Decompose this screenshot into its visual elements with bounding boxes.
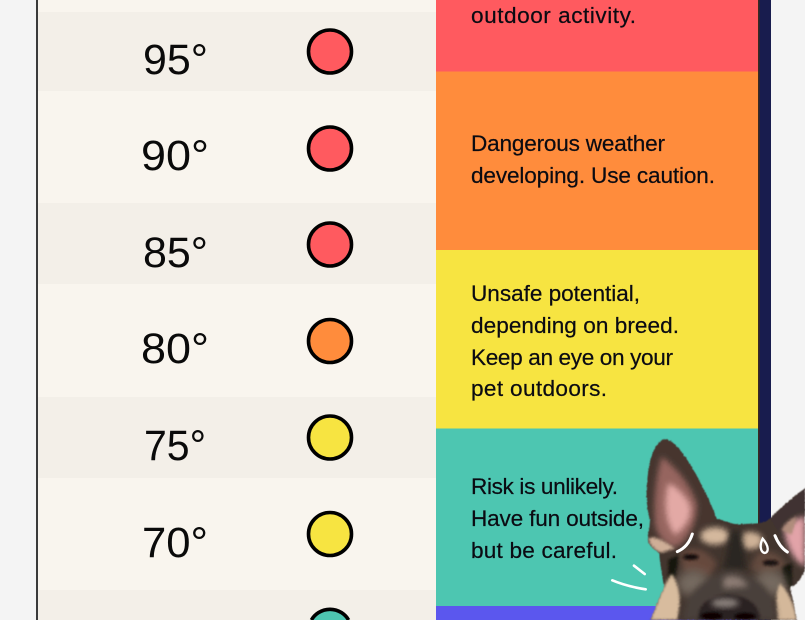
panel: temperature table bbox=[36, 0, 436, 620]
panel: yellow warning band: Keep an eye on your bbox=[471, 345, 673, 370]
illustration: german shepherd dog bbox=[612, 437, 805, 620]
panel: teal safe band: Risk is unlikely. bbox=[471, 474, 618, 499]
cheeks bbox=[677, 570, 710, 597]
tan jaw right bbox=[776, 583, 797, 620]
left ear bbox=[646, 440, 708, 554]
row: 95 degrees bbox=[143, 30, 352, 84]
panel: orange warning band: Dangerous weather bbox=[471, 131, 665, 156]
row: 90 degrees bbox=[141, 127, 352, 180]
row: 75 degrees bbox=[144, 416, 352, 470]
panel: teal safe band: Have fun outside, bbox=[471, 506, 644, 531]
panel: yellow warning band: Unsafe potential, bbox=[471, 281, 640, 306]
row: 80 degrees bbox=[141, 320, 352, 373]
panel: navy card shadow bbox=[759, 0, 771, 620]
panel: red warning band: outdoor activity. bbox=[471, 3, 636, 28]
brow markings bbox=[700, 527, 730, 545]
row: 90 degrees: 90° bbox=[141, 132, 209, 180]
row: 70 degrees: 70° bbox=[142, 519, 208, 567]
panel: teal safe band: but be careful. bbox=[471, 538, 617, 563]
forehead fur bbox=[723, 530, 747, 570]
sketch marks: motion lines bbox=[612, 566, 646, 589]
panel: orange warning band: developing. Use caution. bbox=[471, 163, 715, 188]
row: 85 degrees: 85° bbox=[143, 229, 208, 277]
panel: purple band, cropped bbox=[436, 606, 758, 620]
dark cheek patches bbox=[668, 555, 678, 582]
panel: red warning band bbox=[436, 0, 758, 72]
row: 70 degrees bbox=[142, 512, 352, 567]
panel: yellow warning band bbox=[436, 250, 758, 428]
row: 75 degrees: 75° bbox=[144, 422, 206, 470]
eyes bbox=[683, 554, 699, 560]
card right edge bbox=[758, 0, 760, 620]
row: next temperature indicator, cropped bbox=[311, 609, 349, 620]
row: 95 degrees: 95° bbox=[143, 36, 208, 84]
panel: orange warning band bbox=[436, 72, 758, 250]
panel: yellow warning band: depending on breed. bbox=[471, 313, 679, 338]
nose bbox=[698, 595, 760, 620]
panel: teal safe band bbox=[436, 428, 758, 606]
row: 80 degrees: 80° bbox=[141, 325, 209, 373]
sketch marks: brow and sweat drop bbox=[677, 534, 787, 553]
tan jaw left bbox=[650, 574, 680, 620]
row: 85 degrees bbox=[143, 223, 352, 277]
right ear bbox=[780, 513, 805, 570]
panel: yellow warning band: pet outdoors. bbox=[471, 376, 607, 401]
muzzle bbox=[683, 570, 777, 620]
